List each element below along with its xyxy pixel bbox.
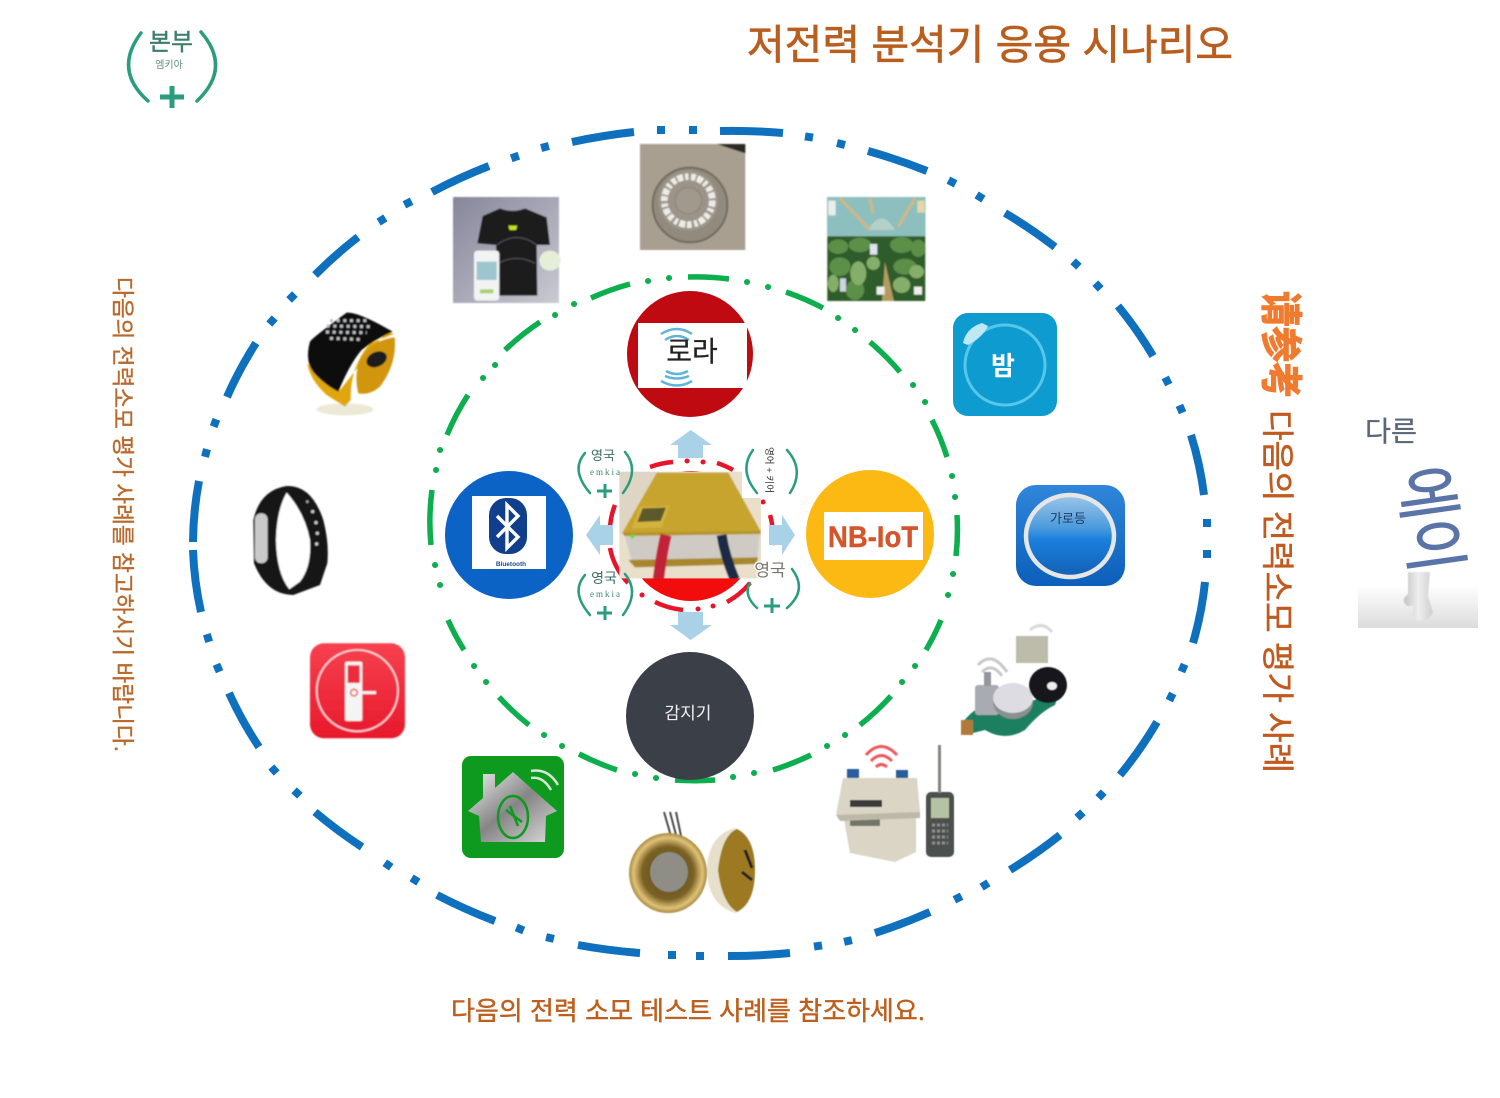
small logo: bottom-left: 영국 [591, 570, 617, 586]
photo: smart manhole [640, 144, 745, 250]
label: other: 다른 [1365, 416, 1417, 447]
node: sensor: 감지기 [665, 704, 711, 723]
figure holding sign [1358, 572, 1478, 628]
arrow up [670, 430, 712, 458]
right vertical heading: Chinese emphasis: 请参考 [1257, 291, 1304, 398]
small logo: bottom-left: emkia [590, 589, 622, 599]
logo: top-left: 본부 [149, 29, 193, 56]
photo: smart ring [307, 313, 395, 415]
analyzer photo [617, 470, 763, 580]
left vertical note: 다음의 전력소모 평가 사례를 참고하시기 바랍니다. [110, 277, 136, 752]
node: NB-IoT: NB-IoT [828, 521, 918, 554]
icon: street lamp: 가로등 [1050, 511, 1086, 526]
logo: top-left [129, 29, 216, 108]
title: 저전력 분석기 응용 시나리오 [747, 22, 1233, 68]
photo: gas meter [836, 745, 954, 862]
small logo: bottom-right: 영국 [754, 561, 786, 580]
small logo: top-right: 영어 + 키어 [763, 447, 774, 493]
hub red ring [610, 461, 773, 610]
icon: smart parking [953, 313, 1057, 416]
inner green dash-dot ellipse [430, 277, 957, 781]
small logo: bottom-right [748, 561, 799, 613]
small logo: top-left: emkia [590, 467, 622, 477]
photo: fitness band [253, 486, 328, 595]
right vertical heading: Korean: 다음의 전력소모 평가 사례 [1259, 410, 1296, 773]
photo: smart t-shirt [453, 197, 561, 303]
photo: pressure sensors [629, 812, 755, 913]
central analyzer hub [610, 461, 773, 610]
arrow left [586, 515, 613, 555]
hub red disc [626, 471, 756, 601]
photo: water meter [961, 625, 1067, 736]
arrow right [769, 515, 795, 555]
arrow down [670, 612, 712, 640]
icon: street lamp [1016, 485, 1125, 586]
label: A rotated: 에이 [1384, 462, 1473, 577]
node: NB-IoT [806, 470, 934, 598]
small logo: top-right [742, 446, 802, 498]
node: sensor [626, 652, 754, 780]
icon: smart parking: 밤 [991, 351, 1015, 381]
icon: smart home [462, 756, 564, 858]
small logo: bottom-left [579, 570, 632, 620]
node: Bluetooth: Bluetooth [496, 561, 526, 568]
node: LoRa: 로라 [666, 336, 718, 367]
outer blue dash-dot ellipse [193, 130, 1207, 956]
small logo: top-left [579, 448, 632, 498]
logo: top-left: 엠키아 [155, 59, 183, 71]
bottom note: 다음의 전력 소모 테스트 사례를 참조하세요. [451, 996, 925, 1026]
photo: greenhouse [827, 197, 926, 301]
icon: smart lock [310, 643, 405, 738]
node: Bluetooth [445, 471, 573, 599]
node: LoRa [627, 291, 753, 417]
small logo: top-left: 영국 [591, 448, 615, 463]
